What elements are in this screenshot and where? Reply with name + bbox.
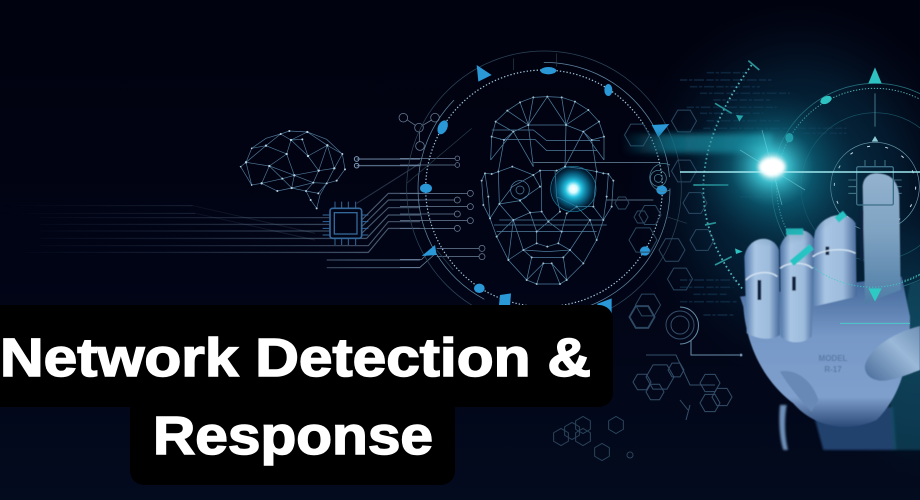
model label on the palm	[819, 354, 848, 374]
hand body	[740, 173, 920, 427]
title: Response	[153, 406, 433, 466]
circuit lines on the left	[0, 159, 420, 268]
hexagon network around the ring	[615, 110, 714, 327]
glowing eye	[549, 165, 597, 213]
model label on the palm: MODEL	[819, 354, 848, 363]
dim data streams	[680, 73, 847, 315]
wrist and cable	[779, 280, 920, 450]
lens flare	[625, 87, 920, 247]
dotted arc with markers	[693, 61, 759, 290]
HUD overlay across the hand	[813, 167, 920, 323]
lower right hexagon circuit graphics	[629, 306, 742, 420]
wireframe face	[481, 96, 660, 285]
model label on the palm: R-17	[824, 365, 842, 374]
title	[0, 328, 591, 466]
connector nodes beside the face ring	[399, 113, 485, 267]
small hexagons below	[550, 414, 633, 463]
face scanning ring	[407, 51, 687, 326]
icon: circuit chip	[323, 157, 368, 245]
icon: wireframe brain	[240, 130, 346, 209]
title: Network Detection &	[0, 328, 591, 388]
robotic hand	[740, 173, 920, 450]
target ring at right of face	[650, 163, 670, 191]
right side teal glow	[630, 0, 920, 480]
HUD rings around the fingertip	[735, 67, 920, 290]
title background	[0, 305, 613, 485]
teal light band	[622, 134, 772, 153]
